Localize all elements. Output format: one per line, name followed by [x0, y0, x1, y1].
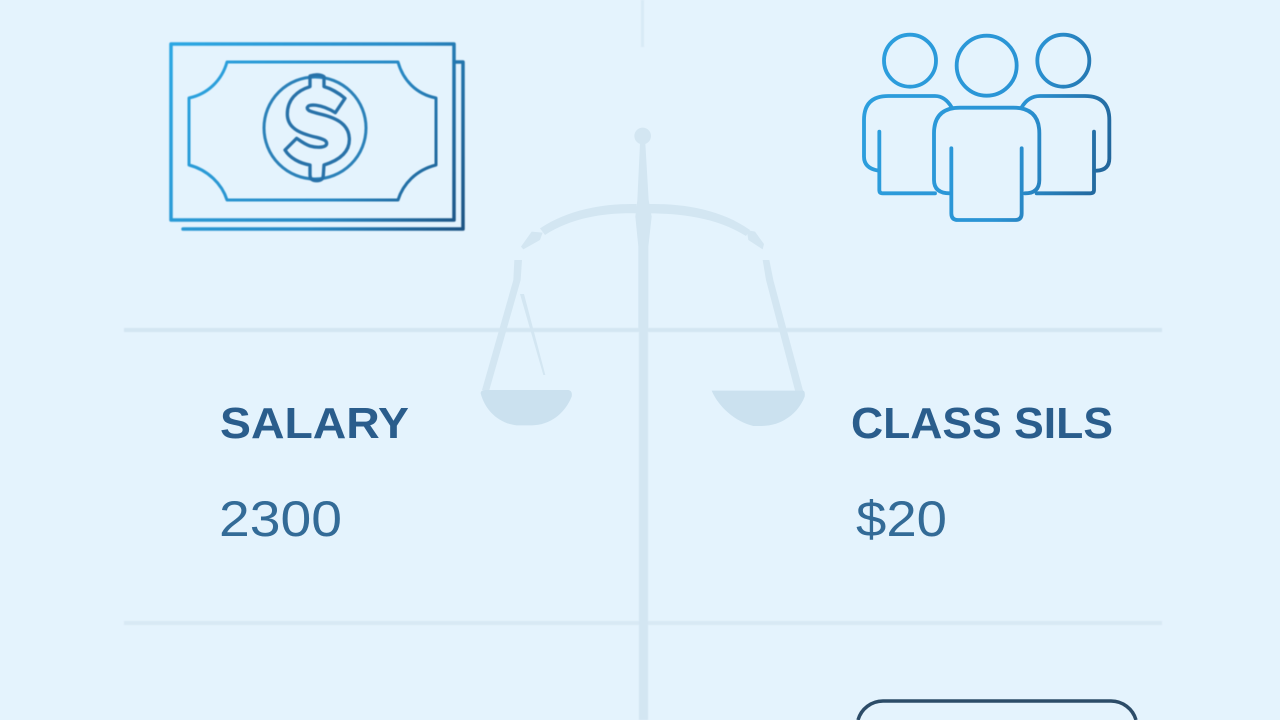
- icon: balance scale: [481, 128, 805, 426]
- heading: class sils: CLASS SILS: [851, 399, 1113, 448]
- icon: group of three people: [864, 35, 1109, 220]
- button outline: [858, 701, 1136, 720]
- heading: salary: SALARY: [220, 399, 409, 448]
- value: class sils amount: $20: [856, 491, 947, 547]
- value: salary amount: 2300: [219, 491, 342, 547]
- icon: dollar sign: [285, 75, 349, 181]
- icon: banknotes with dollar sign: [171, 44, 463, 229]
